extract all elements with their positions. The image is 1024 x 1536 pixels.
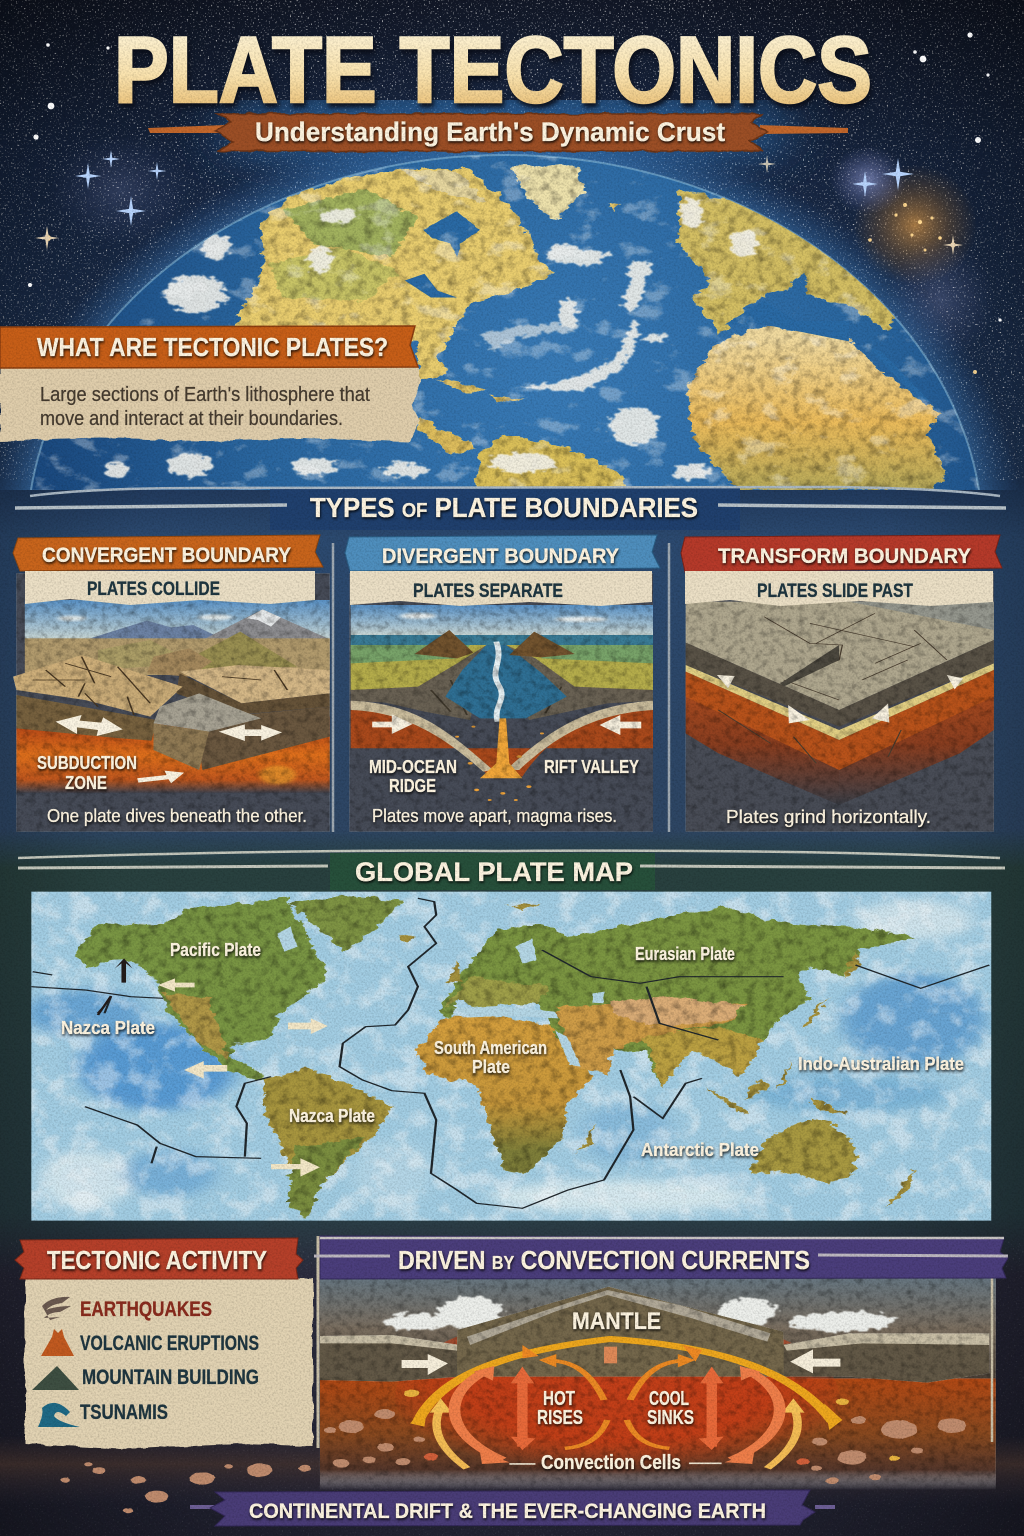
panel: convergent boundary: PLATES COLLIDE [87,579,220,600]
convection clouds [385,1297,895,1332]
icon: wave [38,1403,80,1427]
convergent arrows [56,715,282,783]
lower rock fade band [0,1436,1024,1506]
panel: convection scene [61,1278,996,1513]
title: PLATE TECTONICS [114,17,872,122]
panel: divergent boundary: Plates move apart, magma rises. [372,805,617,826]
globe clouds [106,198,757,480]
definition paper: move and interact at their boundaries. [40,408,343,430]
heading: types of plate boundaries [15,487,1006,530]
map plate labels: Pacific Plate [170,940,261,960]
panel: convergent boundary [13,535,330,832]
panel: convergent boundary: CONVERGENT BOUNDARY [42,543,291,567]
subtitle ribbon: Understanding Earth's Dynamic Crust [255,117,725,147]
subtitle ribbon [148,114,848,151]
map plate labels: Nazca Plate [289,1106,375,1126]
map plate labels: Eurasian Plate [635,944,735,964]
star field and nebula [28,32,1002,374]
panel: tectonic activity: VOLCANIC ERUPTIONS [80,1332,259,1355]
panel: divergent boundary: PLATES SEPARATE [413,581,563,602]
map plate labels: Plate [472,1057,510,1077]
activity paper [25,1278,313,1449]
heading: global plate map [18,851,1005,890]
panel: tectonic activity: EARTHQUAKES [80,1298,212,1321]
map inland seas [278,927,604,1067]
panel: transform boundary: PLATES SLIDE PAST [757,581,913,602]
map motion arrows [98,958,328,1177]
panel: divergent boundary: DIVERGENT BOUNDARY [382,544,619,568]
map plate labels: South American [434,1038,547,1058]
plates slide past caption paper [685,571,993,606]
panel: convection scene: COOL [649,1388,689,1410]
panel: world map [26,892,991,1221]
map plate labels: Antarctic Plate [641,1140,759,1160]
map plate labels: Indo-Australian Plate [798,1054,964,1074]
heading ribbon: WHAT ARE TECTONIC PLATES? [37,332,388,362]
transform banner [681,535,1002,572]
panel: convection scene: RISES [537,1407,583,1429]
activity banner [15,1238,303,1279]
panel: convection scene: HOT [543,1388,575,1410]
panel: transform boundary: Plates grind horizontally. [726,806,931,827]
panel: convergent boundary: ZONE [65,773,107,793]
divergent banner [345,535,660,571]
panel: divergent boundary [345,535,660,832]
definition paper: Large sections of Earth's lithosphere that [40,384,370,406]
plate boundary lines [31,898,989,1208]
footer ribbon: CONTINENTAL DRIFT & THE EVER-CHANGING EARTH [249,1500,766,1523]
convection arrows [402,1349,840,1468]
heading: types of plate boundaries: TYPES OF PLATE BOUNDARIES [310,492,698,523]
divergent illustration [349,573,653,832]
panel: divergent boundary: RIDGE [389,776,436,796]
transform illustration [686,573,994,832]
plates collide caption paper [25,571,315,605]
definition paper [0,366,420,441]
side crust plates [320,1287,989,1383]
footer ribbon [190,1490,835,1526]
panel: divergent boundary: MID-OCEAN [369,757,457,777]
panel: convergent boundary: One plate dives beneath the other. [47,805,307,826]
panel: tectonic activity: MOUNTAIN BUILDING [82,1366,259,1389]
heading: driven by convection currents: DRIVEN BY CONVECTION CURRENTS [398,1245,810,1275]
icon: volcano [41,1329,74,1356]
map landmasses [75,897,916,1218]
panel: convection scene: SINKS [647,1407,694,1429]
convergent illustration [13,573,330,832]
panel: convergent boundary: SUBDUCTION [37,753,137,773]
panel: tectonic activity: TSUNAMIS [80,1401,168,1424]
panel: transform boundary: TRANSFORM BOUNDARY [718,544,971,568]
icon: mountain [32,1366,79,1390]
panel: what are tectonic plates [0,326,420,441]
map plate labels: Nazca Plate [61,1018,155,1038]
globe seas [405,211,931,402]
convergent banner [13,535,323,571]
map ocean [26,892,991,1221]
earth globe [0,100,1013,571]
panel: convection scene: Convection Cells [541,1452,681,1474]
icon: earthquake [42,1297,71,1320]
central mountain [457,1287,784,1377]
heading: global plate map: GLOBAL PLATE MAP [355,857,633,887]
panel: tectonic activity: TECTONIC ACTIVITY [47,1245,267,1275]
globe landmasses [232,166,948,490]
plates separate caption paper [350,571,652,606]
panel: divergent boundary: RIFT VALLEY [544,757,639,777]
panel: convection scene: MANTLE [572,1308,661,1335]
map plate labels [61,940,964,1160]
heading: driven by convection currents [314,1236,1008,1279]
heading ribbon [0,326,418,368]
mineral rocks [61,1390,966,1513]
panel: transform boundary [681,535,1002,832]
panel: tectonic activity [15,1236,318,1449]
